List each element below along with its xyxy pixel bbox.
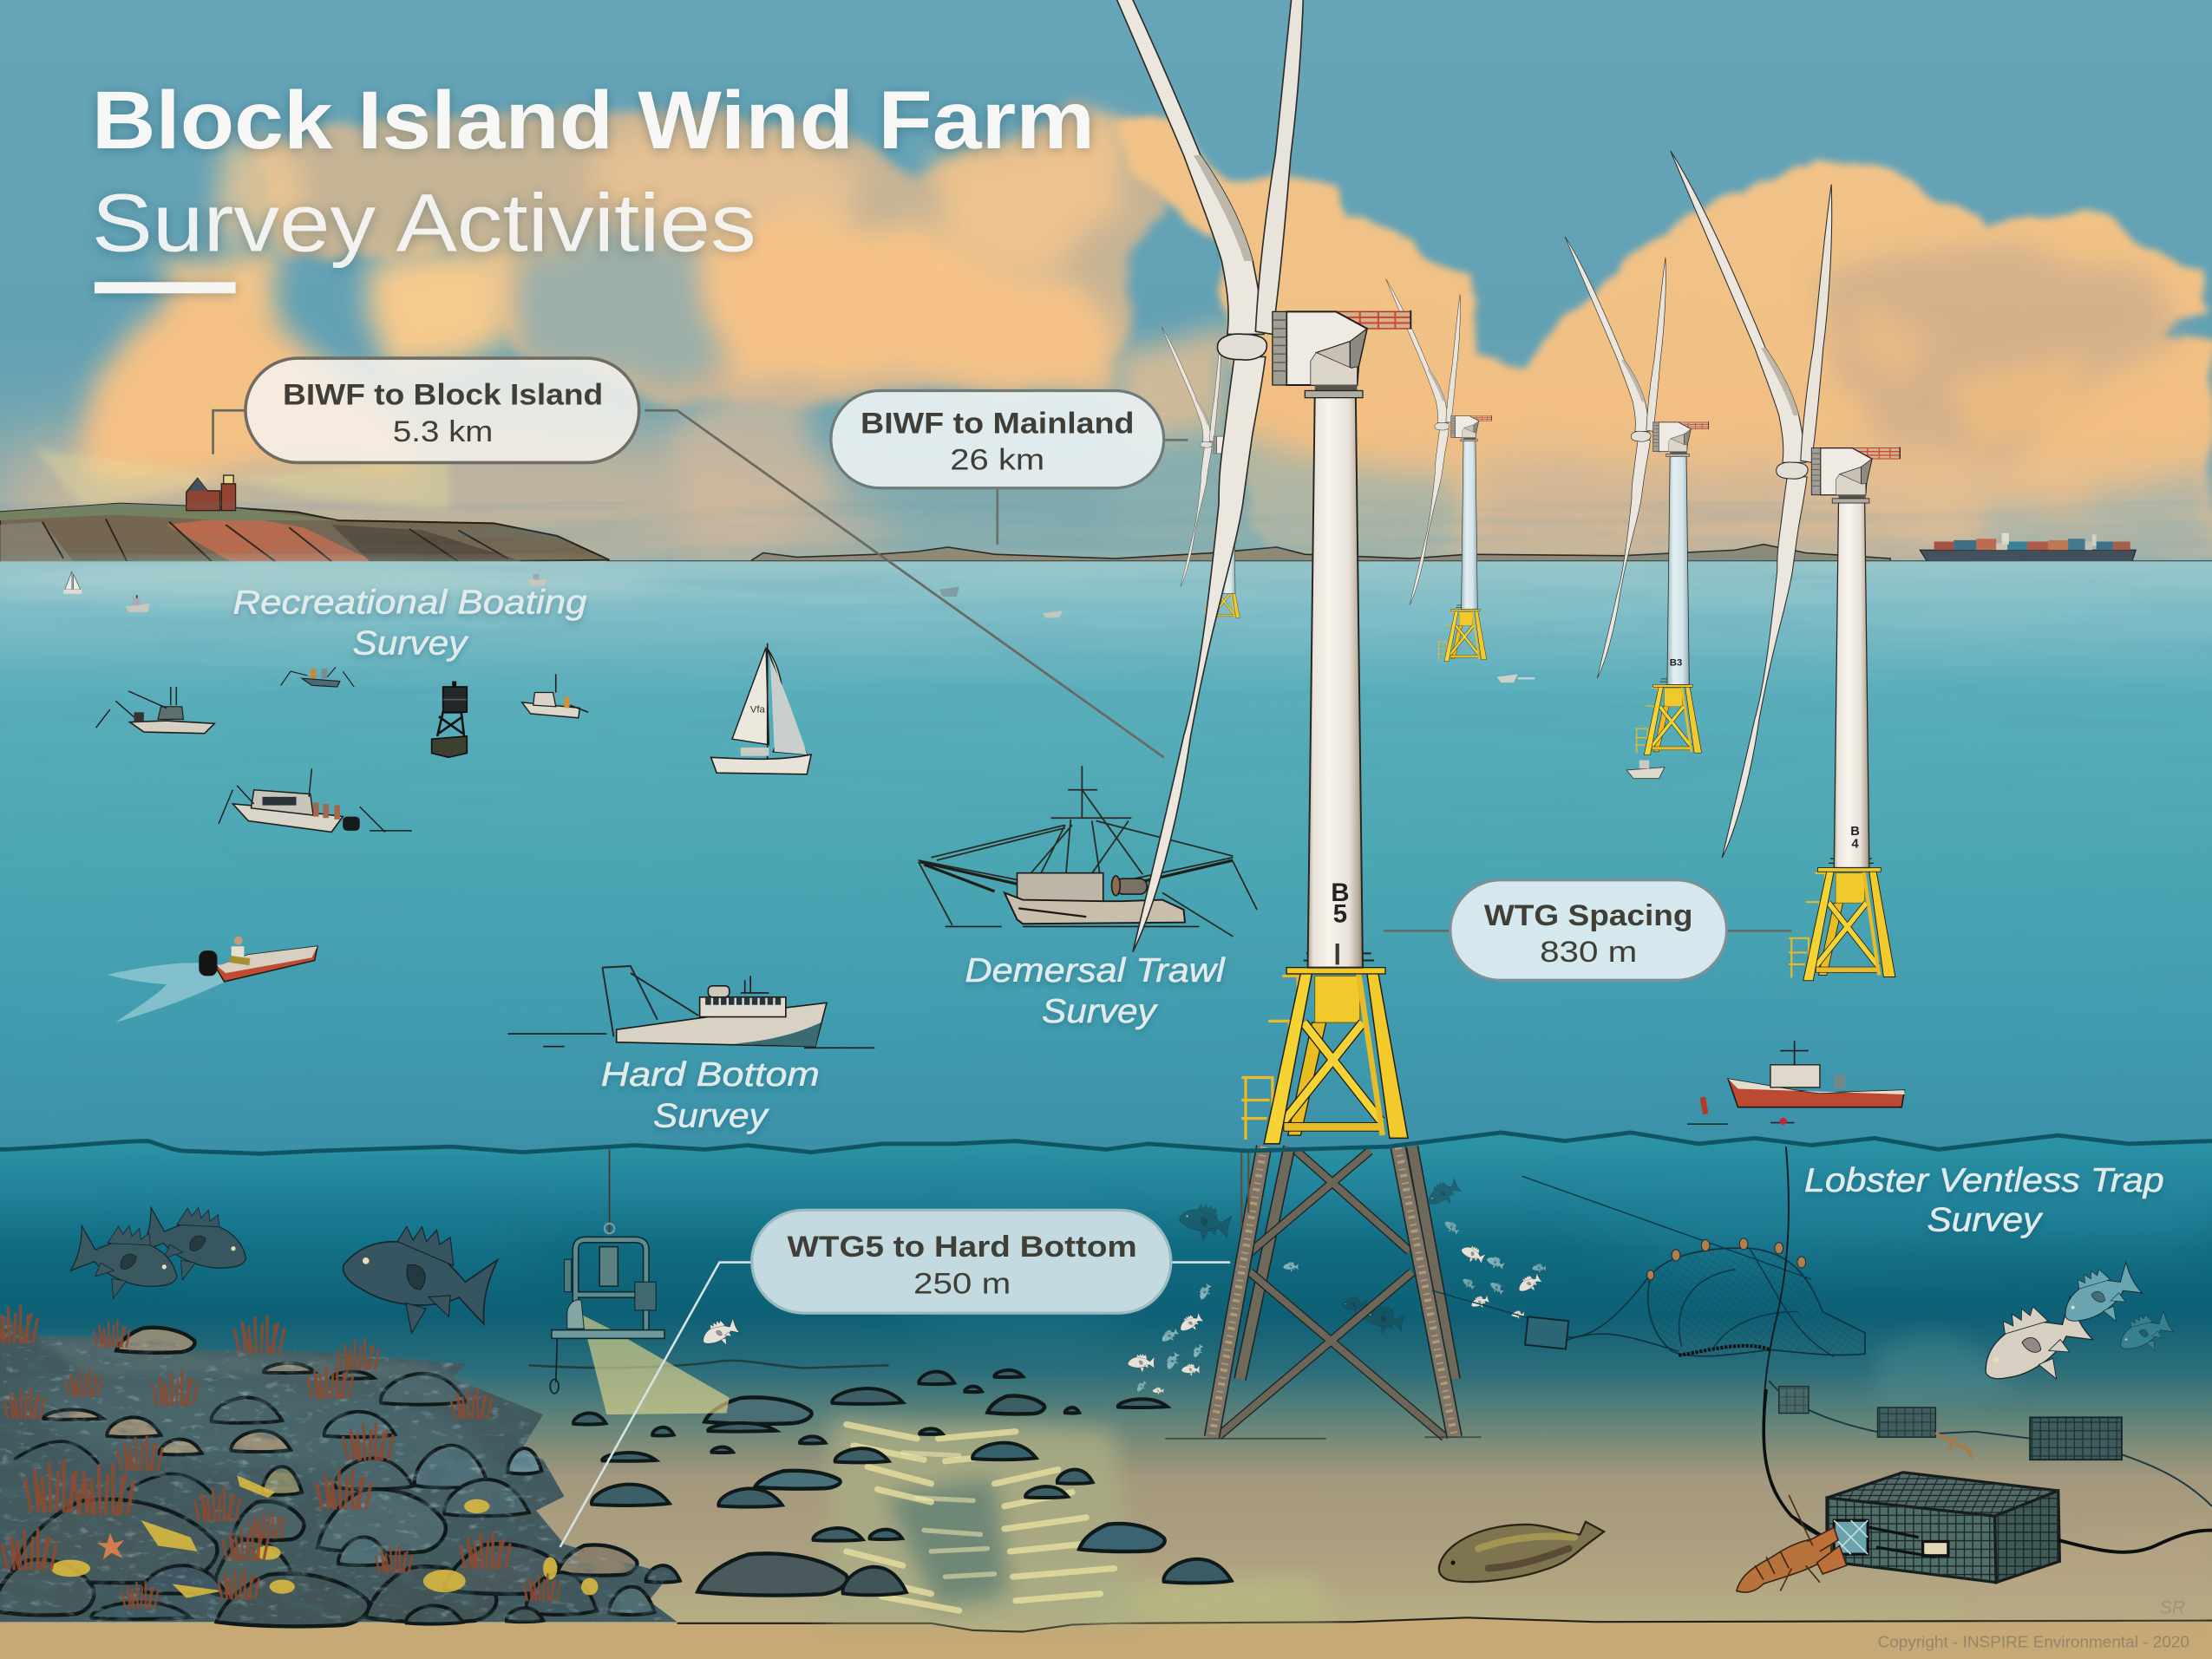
red brick lighthouse building xyxy=(187,475,236,511)
cabin boat with motor xyxy=(219,768,412,833)
demersal trawl net xyxy=(1432,1176,1865,1356)
far wind turbine B1 xyxy=(1162,327,1246,619)
wind turbine B2 xyxy=(1386,279,1492,662)
sea surface xyxy=(0,561,2212,1159)
label: Demersal Trawl Survey: Demersal Trawl xyxy=(965,952,1226,990)
callout: BIWF to Mainland xyxy=(831,390,1188,545)
label: Lobster Ventless Trap Survey xyxy=(1804,1162,2164,1239)
sailboat xyxy=(711,643,811,774)
callout: WTG Spacing xyxy=(1384,880,1791,980)
drop camera frame on line xyxy=(550,1149,664,1394)
subtitle: Survey Activities: Survey Activities xyxy=(92,177,756,268)
red lobster boat xyxy=(1687,1041,1904,1125)
distant small boats xyxy=(63,572,1665,779)
underwater zone xyxy=(0,1133,2212,1650)
lobster pot buoy line xyxy=(1764,1146,1829,1540)
sport fishing boat xyxy=(96,687,214,734)
red algae tufts xyxy=(0,1306,560,1608)
ROV camera light beam xyxy=(581,1315,730,1414)
water surface line xyxy=(0,1133,2212,1153)
wind turbine B4: 4 xyxy=(1851,837,1859,851)
label: Lobster Ventless Trap Survey: Survey xyxy=(1927,1202,2044,1239)
trawl string of lobster traps (distant) xyxy=(1769,1381,2212,1506)
label: Recreational Boating Survey xyxy=(232,584,587,663)
hard bottom survey vessel xyxy=(507,966,874,1048)
callout: BIWF to Block Island: 5.3 km xyxy=(393,415,493,448)
sailboat: Vfa xyxy=(750,704,766,715)
recreational boats group xyxy=(96,643,1904,1125)
copyright: Copyright - INSPIRE Environmental - 2020 xyxy=(1878,1633,2189,1651)
callout: WTG5 to Hard Bottom xyxy=(560,1210,1230,1547)
label: Hard Bottom Survey: Survey xyxy=(653,1097,769,1134)
label: Demersal Trawl Survey xyxy=(965,952,1226,1030)
navigation buoy xyxy=(432,681,467,757)
mainland coastline xyxy=(606,545,2212,563)
callout: WTG5 to Hard Bottom: 250 m xyxy=(913,1267,1011,1300)
red outboard skiff xyxy=(199,937,317,982)
label: Recreational Boating Survey: Survey xyxy=(353,625,469,663)
label: Lobster Ventless Trap Survey: Lobster Ventless Trap xyxy=(1804,1162,2164,1199)
American lobster xyxy=(1737,1495,1847,1592)
tower identifier B5: B xyxy=(1331,879,1350,907)
foundation jacket underwater lattice xyxy=(1165,1146,1482,1439)
tower identifier B5: 5 xyxy=(1333,901,1347,929)
tower identifier B5 xyxy=(1331,879,1350,929)
wind turbine B4 xyxy=(1671,151,1900,981)
callout: BIWF to Block Island: BIWF to Block Island xyxy=(283,379,603,412)
hard bottom boulder pile xyxy=(0,1304,691,1629)
scup fish group xyxy=(1967,1255,2177,1407)
school of small fish around foundation xyxy=(697,1218,1546,1394)
title: Block Island Wind Farm: Block Island Wind Farm xyxy=(92,75,1095,166)
label: Hard Bottom Survey: Hard Bottom xyxy=(601,1056,820,1094)
callout: WTG Spacing: WTG Spacing xyxy=(1484,899,1693,932)
title block xyxy=(92,75,1095,293)
wind turbine B3: B3 xyxy=(1670,658,1682,669)
callout: BIWF to Mainland: 26 km xyxy=(950,444,1044,477)
callout: WTG Spacing: 830 m xyxy=(1540,936,1637,969)
artist signature: SR xyxy=(2160,1597,2185,1617)
callout: BIWF to Mainland: BIWF to Mainland xyxy=(861,407,1135,440)
yellow encrusting patches xyxy=(51,1475,599,1598)
label: Demersal Trawl Survey: Survey xyxy=(1042,993,1158,1030)
lighthouse light beams xyxy=(34,448,448,511)
black sea bass fish xyxy=(67,1197,501,1348)
callout: BIWF to Block Island xyxy=(213,358,1164,757)
small boat far left xyxy=(126,595,149,612)
sky background xyxy=(0,0,2212,567)
small fishing skiff xyxy=(281,667,354,687)
wind turbine B4: B xyxy=(1850,825,1860,839)
callout: WTG5 to Hard Bottom: WTG5 to Hard Bottom xyxy=(787,1231,1137,1264)
title underline bar xyxy=(95,282,236,293)
small sailboat far left xyxy=(63,572,82,594)
skiff wake xyxy=(108,963,226,1022)
foreground ventless lobster trap xyxy=(1827,1473,2212,1583)
sunlight ripple patch on sea floor xyxy=(825,1417,1135,1622)
label: Recreational Boating Survey: Recreational Boating xyxy=(232,584,587,621)
clouds: right cumulus xyxy=(1100,121,2212,565)
rock surface mottling xyxy=(0,1304,691,1629)
Block Island bluffs with lighthouse xyxy=(0,475,610,567)
starfish xyxy=(97,1533,124,1560)
wind turbine B3 xyxy=(1565,237,1708,755)
summer flounder on sand xyxy=(1439,1522,1604,1582)
label: Hard Bottom Survey xyxy=(601,1056,820,1134)
dim distant fish near foundation xyxy=(1176,1175,1464,1337)
container ship on horizon xyxy=(1920,533,2136,563)
scattered seafloor rocks xyxy=(573,1370,1232,1596)
far seabed horizon line xyxy=(529,1361,889,1368)
seabed sand band and floor line xyxy=(0,1523,2212,1659)
labelled main wind turbine B5 xyxy=(1052,0,1410,1144)
cuddy cabin boat with lines xyxy=(522,674,588,718)
trawl fishing vessel xyxy=(919,766,1257,937)
clouds: left translucent cloud mass xyxy=(66,108,1241,543)
